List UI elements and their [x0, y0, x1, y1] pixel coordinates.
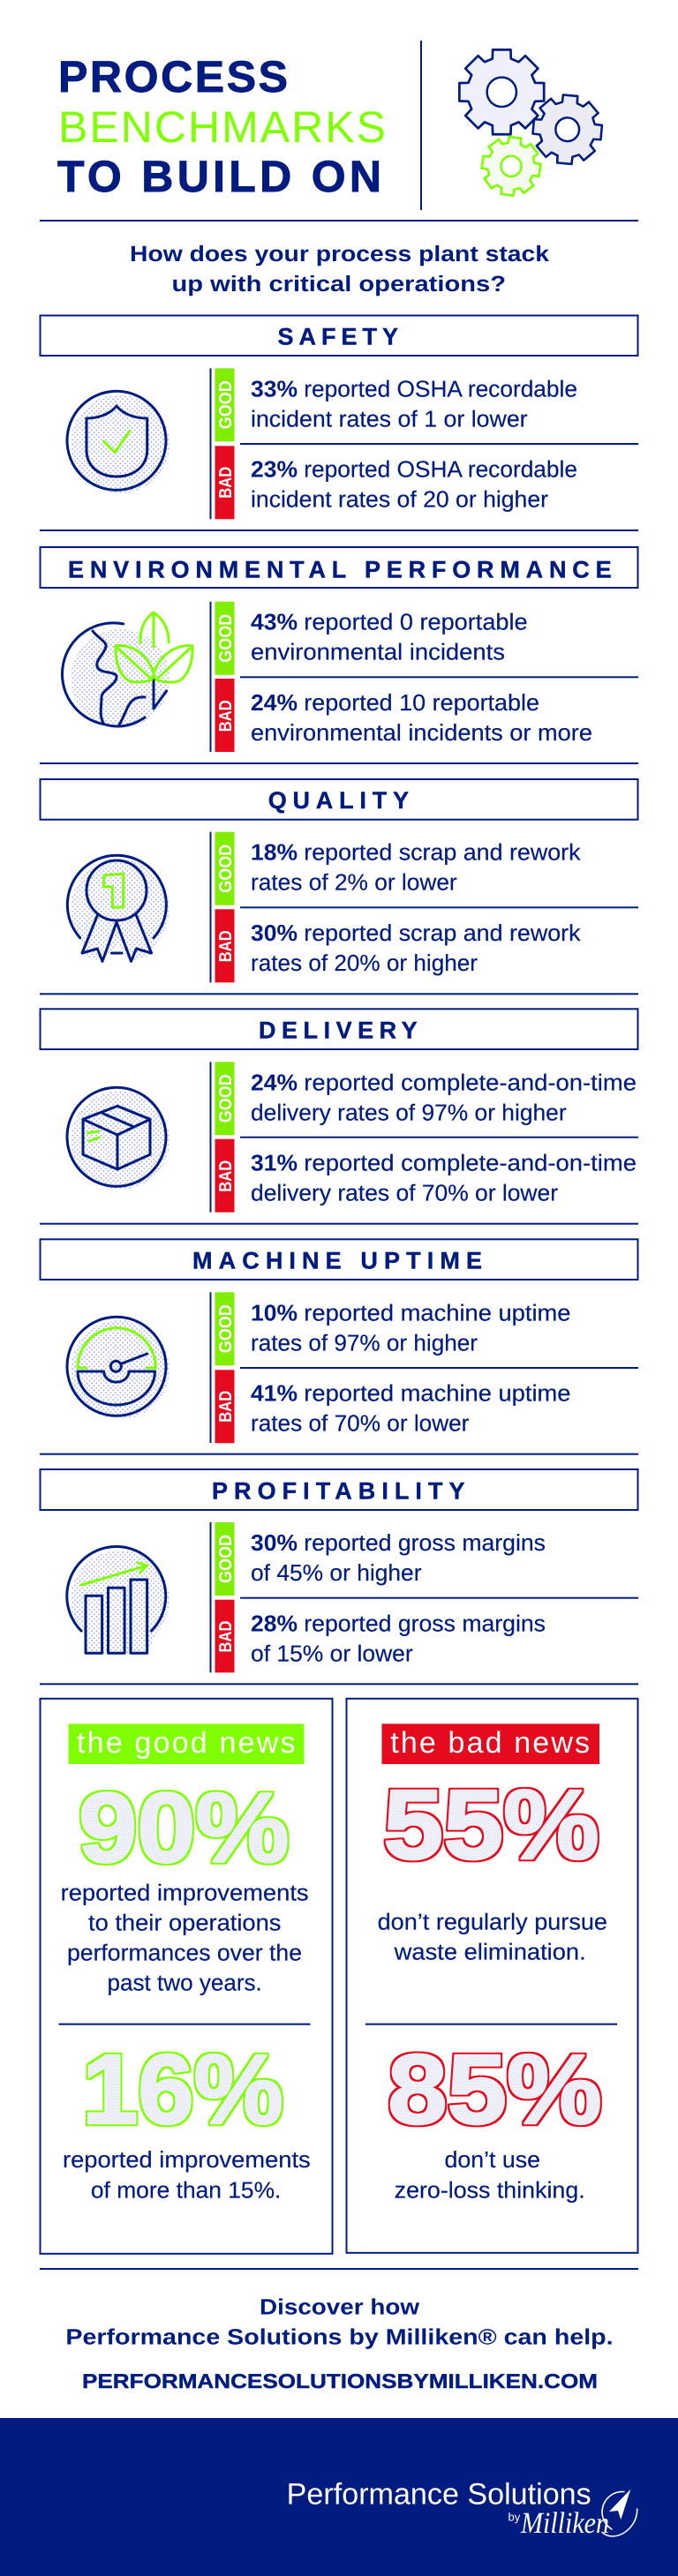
bad bar [215, 1600, 236, 1672]
text: 16% description: reported improvements [63, 2146, 311, 2173]
panel: machine uptime [41, 1239, 638, 1443]
bad bar: BAD [216, 467, 236, 499]
footer logo: Milliken [520, 2507, 609, 2540]
heading: quality: QUALITY [268, 787, 409, 814]
good news label: the good news [77, 1726, 295, 1760]
bad stat: of 15% or lower [251, 1640, 413, 1666]
stat: 55%: 55% [383, 1769, 599, 1880]
icon: bar chart [67, 1547, 170, 1654]
icon: gears [459, 49, 605, 199]
icon: package [67, 1087, 170, 1190]
good stat [251, 609, 528, 665]
bad stat: reported complete-and-on-time [304, 1150, 637, 1176]
good bar: GOOD [216, 845, 236, 893]
call to action: Performance Solutions by Milliken® can help. [65, 2325, 614, 2350]
bad stat [251, 689, 592, 746]
bad stat: incident rates of 20 or higher [251, 486, 548, 513]
good stat: incident rates of 1 or lower [251, 405, 528, 432]
good bar: GOOD [216, 1535, 236, 1583]
heading: quality [41, 779, 637, 820]
text: 90% description: reported improvements [61, 1879, 309, 1905]
good stat: environmental incidents [251, 639, 505, 665]
text: 16% description: of more than 15%. [91, 2177, 281, 2204]
heading: machine uptime [41, 1239, 637, 1280]
bad bar [215, 446, 236, 519]
text: 90% description: past two years. [108, 1970, 262, 1996]
bad stat: 24% [251, 689, 298, 716]
icon: globe and plant [62, 612, 192, 728]
good stat [251, 1069, 637, 1125]
good stat: of 45% or higher [251, 1559, 422, 1586]
title: BENCHMARKS [58, 102, 386, 152]
text: 55% description: waste elimination. [394, 1939, 586, 1965]
good stat: reported scrap and rework [304, 839, 582, 866]
bad news label: the bad news [390, 1726, 590, 1760]
stat: 16%: 16% [82, 2034, 283, 2144]
good stat: reported OSHA recordable [304, 375, 577, 402]
panel: environmental performance [41, 547, 638, 752]
good stat: reported machine uptime [304, 1299, 570, 1326]
good bar: GOOD [216, 614, 236, 663]
good bar: GOOD [216, 380, 236, 429]
text: 90% description: to their operations [88, 1909, 281, 1935]
good stat: reported 0 reportable [304, 609, 528, 635]
bad stat: reported OSHA recordable [304, 456, 577, 483]
bad bar [215, 1139, 236, 1213]
footer logo: by [508, 2511, 521, 2524]
heading: safety: SAFETY [277, 324, 398, 350]
panel: quality [41, 779, 638, 982]
good stat: reported complete-and-on-time [304, 1069, 637, 1095]
bad stat [251, 1380, 570, 1437]
call to action: PERFORMANCESOLUTIONSBYMILLIKEN.COM [82, 2369, 598, 2392]
heading: environmental performance: ENVIRONMENTAL PERFORMANCE [68, 556, 612, 582]
good bar [215, 602, 236, 675]
good stat: rates of 2% or lower [251, 869, 457, 896]
bad bar: BAD [216, 1620, 236, 1652]
good stat [251, 839, 582, 896]
bad stat: 30% [251, 920, 298, 946]
text: 85% description: don’t use [445, 2146, 540, 2173]
bad bar [215, 679, 236, 752]
text: 90% description [61, 1879, 309, 1996]
panel: the good news [41, 1699, 332, 2254]
bad stat: rates of 70% or lower [251, 1410, 470, 1437]
icon: gauge [67, 1317, 170, 1419]
bad stat [251, 920, 582, 976]
bad bar [215, 909, 236, 982]
bad stat: environmental incidents or more [251, 719, 592, 746]
good bar [215, 368, 236, 441]
bad bar: BAD [216, 700, 236, 732]
icon: award ribbon [67, 855, 170, 961]
icon: shield [67, 391, 170, 493]
good stat: 43% [251, 609, 298, 635]
bad stat: reported scrap and rework [304, 920, 582, 946]
good stat [251, 375, 577, 432]
good bar: GOOD [216, 1074, 236, 1123]
bad stat: 31% [251, 1150, 298, 1176]
good stat: 18% [251, 839, 298, 866]
good bar [215, 1522, 236, 1596]
panel: delivery [41, 1009, 638, 1213]
text: 90% description: performances over the [67, 1940, 302, 1966]
heading: profitability [41, 1469, 637, 1510]
heading: delivery [41, 1009, 637, 1049]
good stat: 24% [251, 1069, 298, 1095]
good stat [251, 1529, 546, 1586]
good stat: delivery rates of 97% or higher [251, 1099, 567, 1125]
bad stat [251, 1150, 637, 1206]
good stat: 33% [251, 375, 298, 402]
text: 85% description: zero-loss thinking. [395, 2177, 585, 2204]
good stat: 30% [251, 1529, 298, 1556]
footer logo: Performance Solutions [287, 2478, 591, 2512]
bad bar: BAD [216, 1160, 236, 1192]
title: PROCESS [58, 52, 288, 101]
good bar [215, 1292, 236, 1365]
good stat: 10% [251, 1299, 298, 1326]
heading: delivery: DELIVERY [259, 1018, 418, 1044]
text: 55% description [378, 1909, 607, 1965]
bad stat: 23% [251, 456, 298, 483]
good bar [215, 832, 236, 905]
heading: environmental performance [41, 547, 637, 588]
bad stat: reported 10 reportable [304, 689, 539, 716]
bad stat: delivery rates of 70% or lower [251, 1180, 558, 1206]
call to action: Discover how [260, 2294, 420, 2319]
heading: profitability: PROFITABILITY [212, 1477, 464, 1504]
bad stat: reported machine uptime [304, 1380, 570, 1407]
bad stat: rates of 20% or higher [251, 950, 478, 976]
bad bar: BAD [216, 1391, 236, 1423]
stat: 90%: 90% [79, 1772, 290, 1882]
bad stat: 28% [251, 1610, 298, 1636]
good bar: GOOD [216, 1304, 236, 1353]
bad stat [251, 456, 577, 513]
text: 85% description [395, 2146, 585, 2204]
panel: the bad news [346, 1699, 637, 2253]
good stat [251, 1299, 570, 1356]
heading: safety [41, 316, 637, 356]
text: 55% description: don’t regularly pursue [378, 1909, 607, 1935]
good stat: rates of 97% or higher [251, 1329, 478, 1356]
good stat: reported gross margins [304, 1529, 546, 1556]
footer band [0, 2418, 678, 2576]
subtitle question: How does your process plant stack [130, 242, 549, 267]
bad bar: BAD [216, 930, 236, 962]
title: TO BUILD ON [57, 152, 381, 201]
footer logo [287, 2478, 637, 2540]
panel: profitability [41, 1469, 638, 1672]
good bar [215, 1062, 236, 1135]
bad stat: 41% [251, 1380, 298, 1407]
panel: safety [41, 316, 638, 519]
bad stat: reported gross margins [304, 1610, 546, 1636]
bad stat [251, 1610, 546, 1666]
text: 16% description [63, 2146, 311, 2204]
title [57, 52, 386, 201]
subtitle question [130, 242, 549, 297]
bad bar [215, 1370, 236, 1443]
stat: 85%: 85% [388, 2034, 602, 2144]
call to action [65, 2294, 614, 2392]
heading: machine uptime: MACHINE UPTIME [192, 1248, 482, 1274]
subtitle question: up with critical operations? [171, 272, 506, 297]
